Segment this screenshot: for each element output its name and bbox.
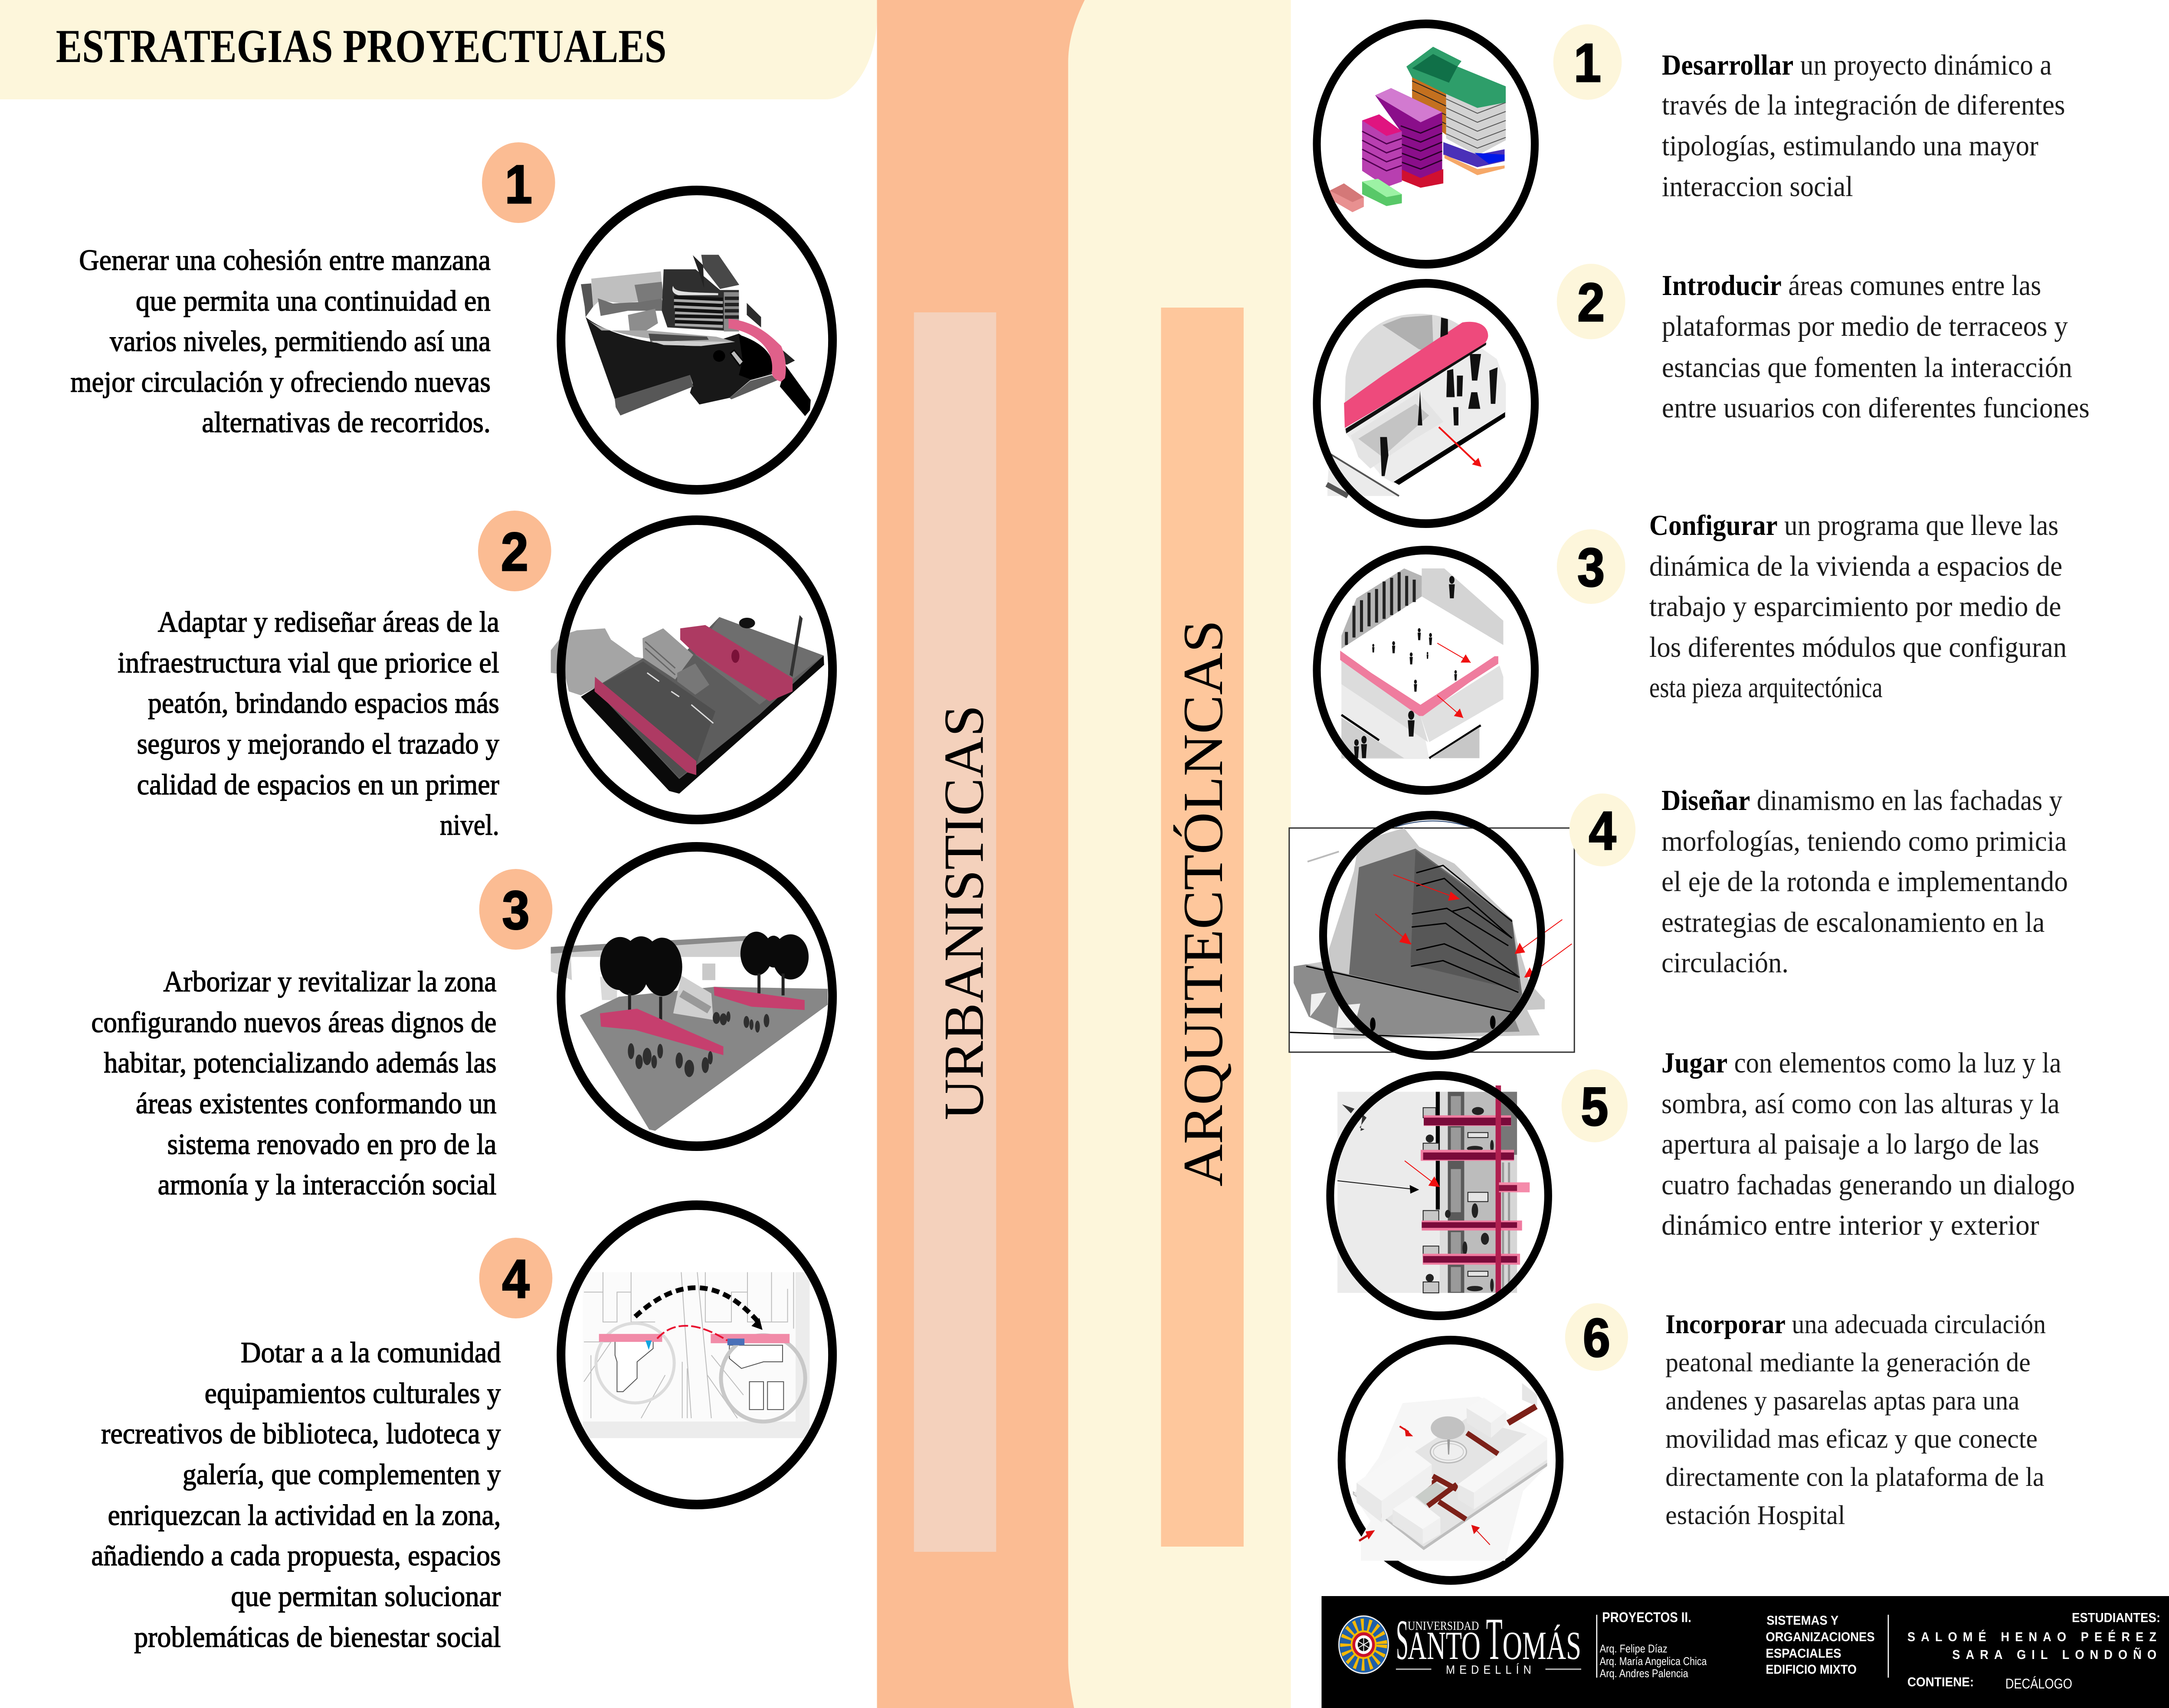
- panel: urbanistic strategy 4: [91, 1238, 809, 1654]
- panel: urbanistic strategy 2: [118, 511, 824, 842]
- illustration: site plan with connection arc: [583, 1272, 809, 1438]
- number badge 1: [1553, 24, 1622, 100]
- text block 1: interaccion social: [1662, 170, 1853, 203]
- number badge 4: [479, 1238, 552, 1318]
- logo: university wordmark: MEDELLÍN: [1446, 1663, 1531, 1676]
- text block 3: armonía y la interacción social: [158, 1168, 497, 1201]
- text block 3: dinámica de la vivienda a espacios de: [1649, 550, 2062, 582]
- text block 6: [1665, 1309, 2046, 1531]
- text block 1: Desarrollar un proyecto dinámico a: [1662, 49, 2052, 81]
- text block 2: estancias que fomenten la interacción: [1662, 351, 2072, 384]
- text block 1: través de la integración de diferentes: [1662, 89, 2065, 121]
- text block 2: calidad de espacios en un primer: [137, 768, 499, 801]
- number badge 2: [1557, 264, 1625, 339]
- number badge 3: 3: [502, 880, 530, 941]
- text block 2: infraestructura vial que priorice el: [118, 646, 499, 679]
- text block 2: [118, 606, 499, 842]
- text block 4: Dotar a a la comunidad: [241, 1336, 501, 1369]
- text block 1: [70, 244, 491, 439]
- text block 3: trabajo y esparcimiento por medio de: [1649, 590, 2061, 623]
- vertical label bar: urbanisticas: [914, 312, 996, 1552]
- number badge 4: 4: [502, 1249, 530, 1309]
- circular frame 2: [1317, 283, 1535, 524]
- number badge 1: 1: [505, 154, 532, 215]
- number badge 4: 4: [1589, 801, 1616, 861]
- text block 1: alternativas de recorridos.: [202, 406, 491, 439]
- panel: urbanistic strategy 3: [91, 869, 828, 1201]
- credits: subject: ESPACIALES: [1766, 1646, 1841, 1661]
- text block 3: los diferentes módulos que configuran: [1649, 631, 2067, 663]
- text block 6: andenes y pasarelas aptas para una: [1665, 1385, 2019, 1416]
- credits: students and contents: [1907, 1610, 2160, 1692]
- text block 6: Incorporar una adecuada circulación: [1665, 1309, 2046, 1340]
- circular frame 5: [1330, 1075, 1548, 1316]
- credits: students and contents: ESTUDIANTES:: [2072, 1610, 2160, 1625]
- number badge 3: [479, 869, 552, 950]
- text block 6: directamente con la plataforma de la: [1665, 1462, 2044, 1492]
- footer: institutional credits: [1321, 1596, 2169, 1708]
- number badge 1: 1: [1574, 33, 1601, 93]
- text block 2: entre usuarios con diferentes funciones: [1662, 391, 2090, 424]
- text block 4: enriquezcan la actividad en la zona,: [108, 1499, 501, 1532]
- text block 1: Generar una cohesión entre manzana: [79, 244, 491, 277]
- panel: architectural strategy 5: [1330, 1046, 2075, 1316]
- number badge 3: 3: [1577, 538, 1605, 598]
- number badge 3: [1557, 529, 1625, 604]
- credits: students and contents: DECÁLOGO: [2005, 1676, 2072, 1692]
- illustration: block model with pink walkway: [581, 255, 811, 416]
- circular frame 4: [1323, 815, 1541, 1056]
- text block 2: nivel.: [440, 809, 499, 842]
- illustration: terrace with pink walkway and people: [1327, 314, 1506, 496]
- text block 6: peatonal mediante la generación de: [1665, 1347, 2031, 1378]
- credits: course and professors: Arq. Andres Palencia: [1600, 1668, 1688, 1680]
- text block 5: dinámico entre interior y exterior: [1661, 1209, 2039, 1241]
- circular frame 3: [1317, 550, 1535, 790]
- credits: students and contents: SARA GIL LONDOÑO: [1952, 1647, 2156, 1662]
- illustration: street block with pink pedestrian strips: [551, 615, 824, 793]
- number badge 5: 5: [1581, 1077, 1608, 1137]
- illustration: tree-lined plaza with pink strips: [551, 932, 828, 1131]
- number badge 2: 2: [501, 522, 528, 582]
- text block 2: seguros y mejorando el trazado y: [137, 728, 499, 761]
- text block 4: estrategias de escalonamiento en la: [1661, 906, 2044, 938]
- number badge 4: [1569, 793, 1635, 866]
- vertical heading: arquitectonicas: ARQUITECTÓLNCAS: [1172, 620, 1234, 1187]
- text block 4: [1661, 784, 2068, 979]
- text block 5: apertura al paisaje a lo largo de las: [1661, 1128, 2039, 1160]
- header: title band: [0, 0, 877, 99]
- illustration: stepped facade building in grey: [1289, 821, 1574, 1052]
- credits: subject: [1766, 1613, 1875, 1677]
- urbanistic circular frames: [561, 190, 832, 1505]
- panel: architectural strategy 6: [1342, 1303, 2046, 1580]
- panel: central orange column: [877, 0, 1113, 1708]
- logo: university wordmark: UNIVERSIDAD: [1408, 1619, 1479, 1633]
- logo: university wordmark: OMÁS: [1503, 1623, 1581, 1668]
- credits: subject: ORGANIZACIONES: [1766, 1630, 1875, 1644]
- text block 6: estación Hospital: [1665, 1500, 1845, 1531]
- text block 4: morfologías, teniendo como primicia: [1661, 825, 2067, 857]
- text block 4: galería, que complementen y: [183, 1458, 501, 1491]
- text block 4: equipamientos culturales y: [205, 1377, 501, 1410]
- text block 5: Jugar con elementos como la luz y la: [1661, 1046, 2061, 1079]
- text block 4: el eje de la rotonda e implementando: [1661, 865, 2068, 898]
- text block 1: mejor circulación y ofreciendo nuevas: [70, 366, 491, 399]
- text block 5: cuatro fachadas generando un dialogo: [1661, 1168, 2075, 1201]
- logo: university wordmark: [1396, 1606, 1581, 1676]
- panel: central cream column: [1068, 0, 1291, 1708]
- panel: architectural strategy 3: [1317, 509, 2067, 790]
- text block 3: Arborizar y revitalizar la zona: [163, 965, 497, 998]
- text block 4: problemáticas de bienestar social: [134, 1621, 501, 1654]
- number badge 2: [478, 511, 551, 591]
- credits: students and contents: SALOMÉ HENAO PEÉREZ: [1907, 1629, 2156, 1644]
- logo: university shield: [1339, 1616, 1389, 1673]
- illustration: stepped plaza with pink railing: [1340, 568, 1503, 759]
- logo: university wordmark: S: [1396, 1609, 1409, 1672]
- text block 3: [1649, 509, 2067, 704]
- text block 1: [1662, 49, 2065, 203]
- text block 6: movilidad mas eficaz y que conecte: [1665, 1423, 2038, 1454]
- vertical heading: urbanisticas: URBANISTICAS: [933, 705, 995, 1120]
- text block 3: habitar, potencializando además las: [104, 1046, 497, 1079]
- text block 2: Adaptar y rediseñar áreas de la: [158, 606, 499, 639]
- text block 4: recreativos de biblioteca, ludoteca y: [101, 1417, 501, 1450]
- number badge 6: 6: [1583, 1308, 1610, 1368]
- credits: course and professors: Arq. Felipe Díaz: [1600, 1643, 1668, 1655]
- text block 1: que permita una continuidad en: [136, 285, 491, 318]
- credits: subject: EDIFICIO MIXTO: [1766, 1662, 1857, 1677]
- text block 3: [91, 965, 497, 1201]
- credits: students and contents: CONTIENE:: [1907, 1675, 1974, 1689]
- number badge 1: [482, 142, 555, 223]
- text block 3: sistema renovado en pro de la: [167, 1128, 497, 1161]
- text block 3: áreas existentes conformando un: [136, 1087, 497, 1120]
- credits: course and professors: PROYECTOS II.: [1602, 1610, 1691, 1625]
- text block 3: esta pieza arquitectónica: [1649, 671, 1883, 704]
- number badge 6: [1565, 1303, 1628, 1371]
- text block 1: varios niveles, permitiendo así una: [110, 325, 491, 358]
- text block 4: Diseñar dinamismo en las fachadas y: [1661, 784, 2062, 816]
- credits: course and professors: Arq. María Angelica Chica: [1600, 1656, 1707, 1668]
- number badge 5: [1562, 1069, 1628, 1142]
- panel: architectural strategy 4: [1289, 784, 2068, 1056]
- text block 5: [1661, 1046, 2075, 1241]
- text block 3: Configurar un programa que lleve las: [1649, 509, 2058, 541]
- logo: university wordmark: T: [1486, 1606, 1503, 1672]
- text block 1: tipologías, estimulando una mayor: [1662, 129, 2038, 162]
- vertical label bar: arquitectonicas: [1161, 308, 1244, 1547]
- text block 4: circulación.: [1661, 946, 1789, 979]
- circular frame 6: [1342, 1340, 1560, 1580]
- text block 2: peatón, brindando espacios más: [148, 687, 499, 720]
- text block 4: que permitan solucionar: [231, 1580, 501, 1613]
- text block 4: [91, 1336, 501, 1654]
- text block 2: plataformas por medio de terraceos y: [1662, 310, 2068, 342]
- panel: architectural strategy 1: [1317, 24, 2065, 264]
- illustration: coloured mixed-use volumes: [1330, 47, 1506, 212]
- logo: university wordmark: ANTO: [1408, 1623, 1481, 1668]
- number badge 2: 2: [1577, 272, 1605, 333]
- title: ESTRATEGIAS PROYECTUALES: [56, 20, 666, 72]
- credits: course and professors: [1600, 1610, 1707, 1680]
- credits: subject: SISTEMAS Y: [1766, 1613, 1838, 1628]
- panel: architectural strategy 2: [1317, 264, 2090, 524]
- text block 3: configurando nuevos áreas dignos de: [91, 1006, 497, 1039]
- text block 2: [1662, 269, 2090, 424]
- text block 5: sombra, así como con las alturas y la: [1661, 1087, 2060, 1120]
- illustration: white volumes with dark red paths: [1353, 1383, 1547, 1561]
- text block 2: Introducir áreas comunes entre las: [1662, 269, 2041, 302]
- circular frame 1: [1317, 24, 1535, 264]
- panel: urbanistic strategy 1: [70, 142, 811, 439]
- text block 4: añadiendo a cada propuesta, espacios: [91, 1539, 501, 1572]
- illustration: facade section with pink slabs: [1337, 1085, 1530, 1293]
